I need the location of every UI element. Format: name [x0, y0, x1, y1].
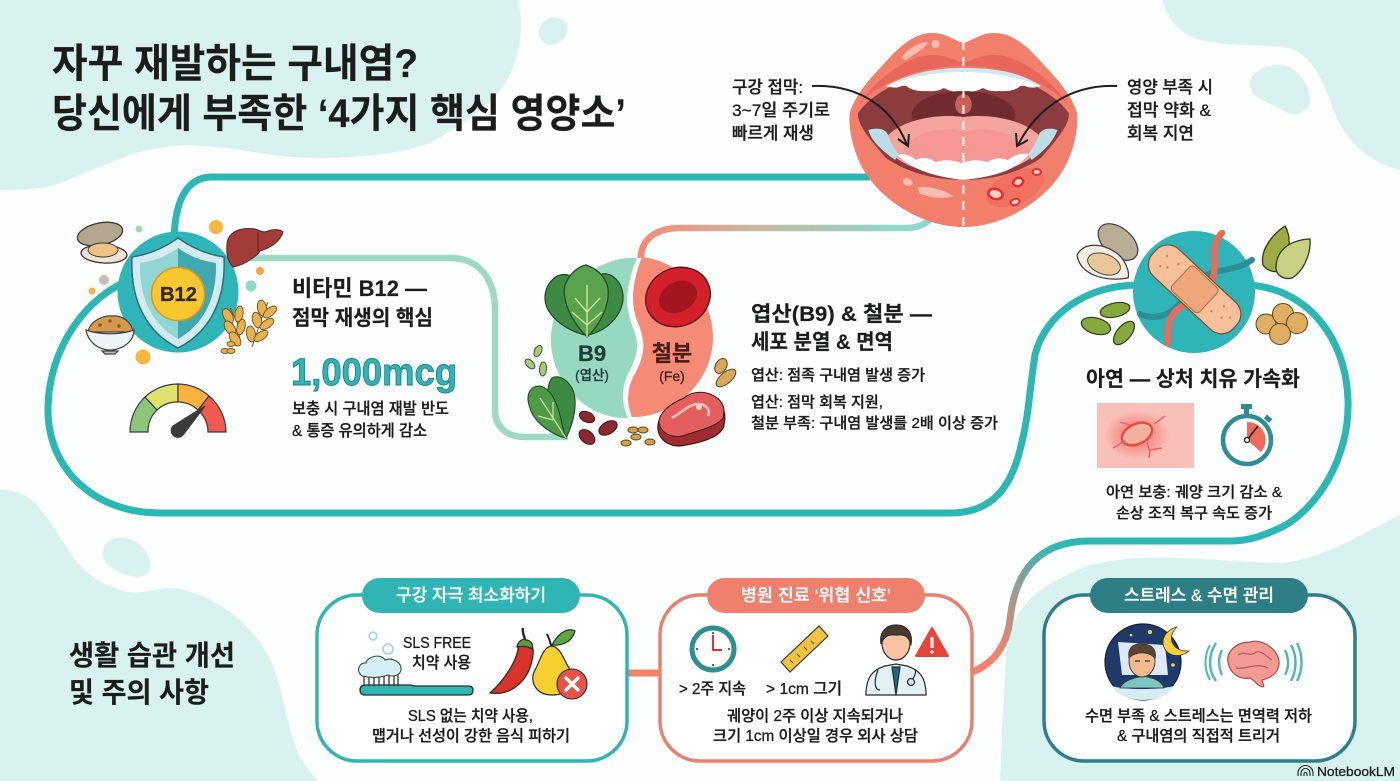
- panel: folate and iron: [523, 257, 998, 447]
- text: B12 heading: 비타민 B12 —: [292, 276, 427, 301]
- panel: warning signs: [660, 578, 972, 761]
- icon: cross mark: [557, 669, 587, 699]
- text: warning description: [713, 707, 918, 745]
- text: zinc description: [1106, 484, 1282, 522]
- text: warning description: 궤양이 2주 이상 지속되거나: [727, 707, 903, 725]
- text: zinc description: 손상 조직 복구 속도 증가: [1116, 505, 1272, 522]
- text: stress description: & 구내염의 직접적 트리거: [1117, 727, 1280, 745]
- illustration: mouth: [849, 33, 1077, 227]
- icon: folate half: [551, 258, 637, 418]
- heading: lifestyle: [69, 640, 235, 708]
- text: zinc heading: 아연 — 상처 치유 가속화: [1086, 368, 1300, 391]
- connector: folate to mouth: [641, 215, 935, 258]
- icon: pumpkin seeds bottom: [1079, 300, 1138, 348]
- text: oral mucosa: 3~7일 주기로: [732, 101, 830, 120]
- icon: peanuts: [712, 356, 739, 390]
- text: stress description: [1085, 707, 1312, 745]
- text: nutrient deficiency: 영양 부족 시: [1127, 78, 1213, 97]
- text: oral mucosa: 구강 접막:: [732, 78, 803, 97]
- icon: toothbrush: [359, 632, 473, 695]
- pill heading: 병원 진료 ‘위협 신호’: [741, 586, 891, 605]
- panel: zinc: [1077, 216, 1310, 522]
- text: stress description: 수면 부족 & 스트레스는 면역력 저하: [1085, 707, 1312, 725]
- text: SLS free: SLS FREE: [403, 635, 471, 652]
- text: B12 heading: 점막 재생의 핵심: [292, 307, 433, 330]
- icon: spinach bottom: [528, 377, 575, 438]
- text: oral mucosa: 빠르게 재생: [732, 124, 814, 143]
- text: SLS free: 치약 사용: [412, 654, 471, 672]
- text: two weeks: > 2주 지속: [679, 680, 746, 698]
- text: oral mucosa: [732, 78, 830, 143]
- icon: B12 shield: [118, 232, 238, 352]
- heading: lifestyle: 및 주의 사항: [69, 677, 209, 708]
- icon: dose gauge: [130, 384, 226, 437]
- watermark: NotebookLM: NotebookLM: [1317, 764, 1395, 779]
- text: nutrient deficiency: 접막 약화 &: [1127, 101, 1212, 120]
- title: 당신에게 부족한 ‘4가지 핵심 영양소’: [52, 92, 626, 136]
- stat: 1,000mcg: 1,000mcg: [291, 352, 457, 394]
- icon: wheat: [220, 299, 279, 354]
- arrow: left mucosa: [812, 86, 909, 146]
- text: folate heading: [751, 303, 932, 354]
- text: B9 label: [575, 341, 609, 383]
- panel: minimize irritation: [317, 578, 627, 761]
- icon: warning triangle: [916, 628, 948, 656]
- icon: steak: [658, 392, 725, 446]
- text: B9 label: B9: [578, 341, 606, 366]
- pill heading: 구강 자극 최소화하기: [396, 586, 546, 605]
- icon: kidney beans: [576, 409, 620, 447]
- text: folate description: [751, 367, 998, 432]
- text: irritation description: [372, 707, 570, 745]
- panel: stress and sleep: [1044, 578, 1355, 761]
- heading: lifestyle: 생활 습관 개선: [69, 640, 235, 671]
- icon: doctor: [866, 625, 926, 695]
- text: SLS free: [403, 635, 471, 672]
- icon: B12 shield: B12: [160, 284, 197, 306]
- decorative dots: [88, 220, 264, 364]
- icon: ulcer: [1097, 403, 1194, 468]
- icon: clam: [75, 218, 127, 264]
- text: zinc description: 아연 보충: 궤양 크기 감소 &: [1106, 484, 1282, 501]
- connector: zinc to lifestyle: [972, 285, 1348, 672]
- icon: iron half: [628, 257, 713, 417]
- text: B12 heading: [292, 276, 433, 330]
- text: folate description: 엽산: 점막 회복 지원,: [751, 394, 883, 411]
- text: B12 description: 보충 시 구내염 재발 반도: [292, 400, 449, 418]
- text: nutrient deficiency: 회복 지연: [1127, 124, 1194, 143]
- pill heading: [1090, 578, 1308, 613]
- text: iron label: (Fe): [659, 368, 685, 384]
- text: nutrient deficiency: [1127, 78, 1213, 143]
- icon: small seeds: [621, 427, 655, 446]
- connector: B12 to folate: [250, 258, 568, 437]
- pill heading: [362, 578, 580, 613]
- icon: green seeds: [523, 344, 547, 376]
- pill heading: [707, 578, 925, 613]
- icon: brain with waves: [1206, 641, 1302, 687]
- text: one centimeter: > 1cm 그기: [766, 680, 842, 698]
- text: folate heading: 엽산(B9) & 철분 —: [751, 303, 932, 326]
- text: folate heading: 세포 분열 & 면역: [751, 331, 893, 354]
- text: folate description: 엽산: 점족 구내염 발생 증가: [751, 367, 925, 384]
- icon: ruler: [781, 626, 828, 672]
- connector: panel 1 to panel 2: [627, 670, 660, 676]
- icon: stopwatch: [1223, 404, 1272, 464]
- icon: sleeping person: [1105, 624, 1181, 700]
- text: folate description: 철분 부족: 구내염 발생를 2배 이상 증가: [751, 415, 998, 432]
- connector: teal route from mouth to B12: [174, 177, 870, 240]
- title: [52, 42, 626, 136]
- icon: liver: [227, 229, 283, 267]
- icon: crescent moon: [1163, 627, 1189, 656]
- text: irritation description: 맵거나 선성이 강한 음식 피하기: [372, 727, 570, 745]
- icon: red blood cell: [636, 257, 720, 337]
- icon: clock: [692, 628, 734, 670]
- icon: chickpeas: [1256, 304, 1308, 344]
- icon: bandage and DNA: [1133, 231, 1255, 353]
- panel: vitamin B12: [75, 218, 457, 440]
- connector: teal route from B12 to zinc: [48, 278, 1140, 513]
- icon: chili pepper: [490, 628, 533, 693]
- text: B9 label: (엽산): [575, 368, 609, 383]
- icon: pumpkin seeds top: [1262, 226, 1310, 279]
- icon: pear: [533, 630, 575, 695]
- text: B12 description: & 통증 유의하게 감소: [292, 422, 427, 440]
- icon: bowl of grains: [86, 316, 134, 354]
- icon: spinach top: [545, 265, 623, 337]
- arrow: right mucosa: [1016, 86, 1117, 146]
- text: irritation description: SLS 없는 치약 사용,: [408, 707, 533, 725]
- pill heading: 스트레스 & 수면 관리: [1124, 586, 1274, 605]
- title: 자꾸 재발하는 구내염?: [52, 42, 418, 86]
- text: iron label: [652, 341, 692, 384]
- text: B12 description: [292, 400, 449, 440]
- icon: oyster: [1077, 216, 1145, 279]
- text: warning description: 크기 1cm 이상일 경우 외사 상담: [713, 727, 918, 745]
- text: iron label: 철분: [652, 341, 692, 366]
